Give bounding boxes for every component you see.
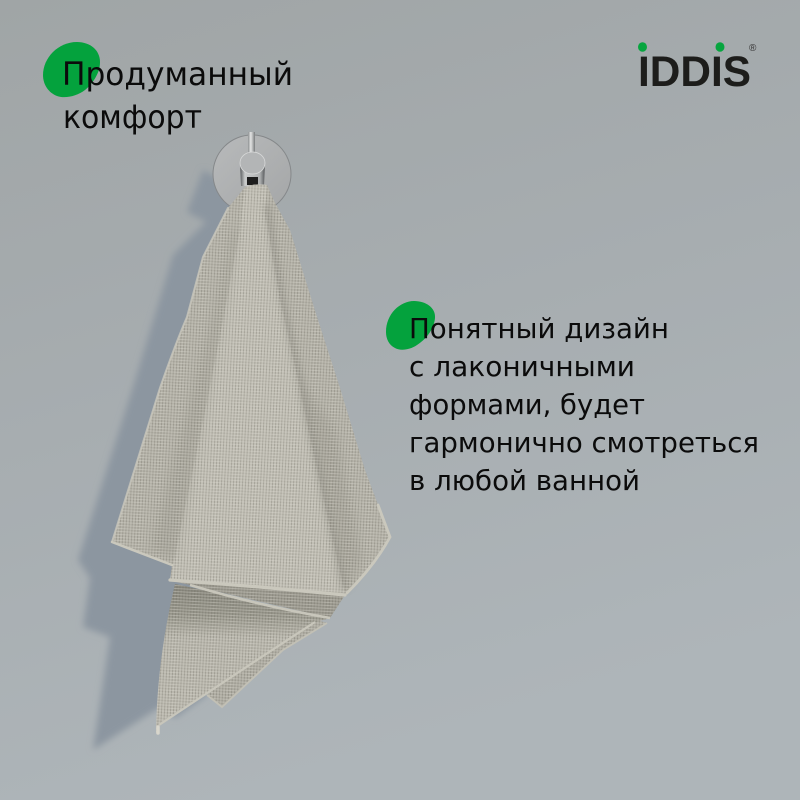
description text: формами, будет [409, 389, 645, 421]
description text: гармонично смотреться [409, 427, 759, 459]
description text: с лаконичными [409, 351, 635, 383]
back flap [207, 615, 327, 707]
front flap [156, 584, 330, 734]
heading: Продуманный [62, 55, 293, 93]
towel body [112, 184, 390, 595]
lower folded corner [156, 581, 345, 734]
towel fold shading [150, 205, 362, 590]
logo dots [638, 42, 724, 52]
inner fold [172, 581, 345, 618]
heading: комфорт [63, 98, 202, 136]
hook wall plate [213, 135, 291, 213]
green blob behind description [386, 301, 435, 350]
hook barrel [240, 164, 265, 186]
heading [62, 55, 293, 136]
towel weave texture [112, 184, 390, 595]
hook rod [248, 132, 255, 154]
registered mark: ® [749, 43, 757, 54]
towel hem edges [112, 208, 390, 595]
hook knob [240, 152, 265, 174]
towel shadow on wall [78, 170, 240, 750]
logo: IDDIS: IDDIS [638, 48, 751, 96]
towel centre panel [170, 184, 345, 593]
description text: в любой ванной [409, 465, 640, 497]
towel hook [213, 132, 291, 213]
towel [112, 184, 390, 734]
green blob behind heading [43, 42, 100, 97]
description text [409, 313, 759, 497]
description text: Понятный дизайн [409, 313, 669, 345]
